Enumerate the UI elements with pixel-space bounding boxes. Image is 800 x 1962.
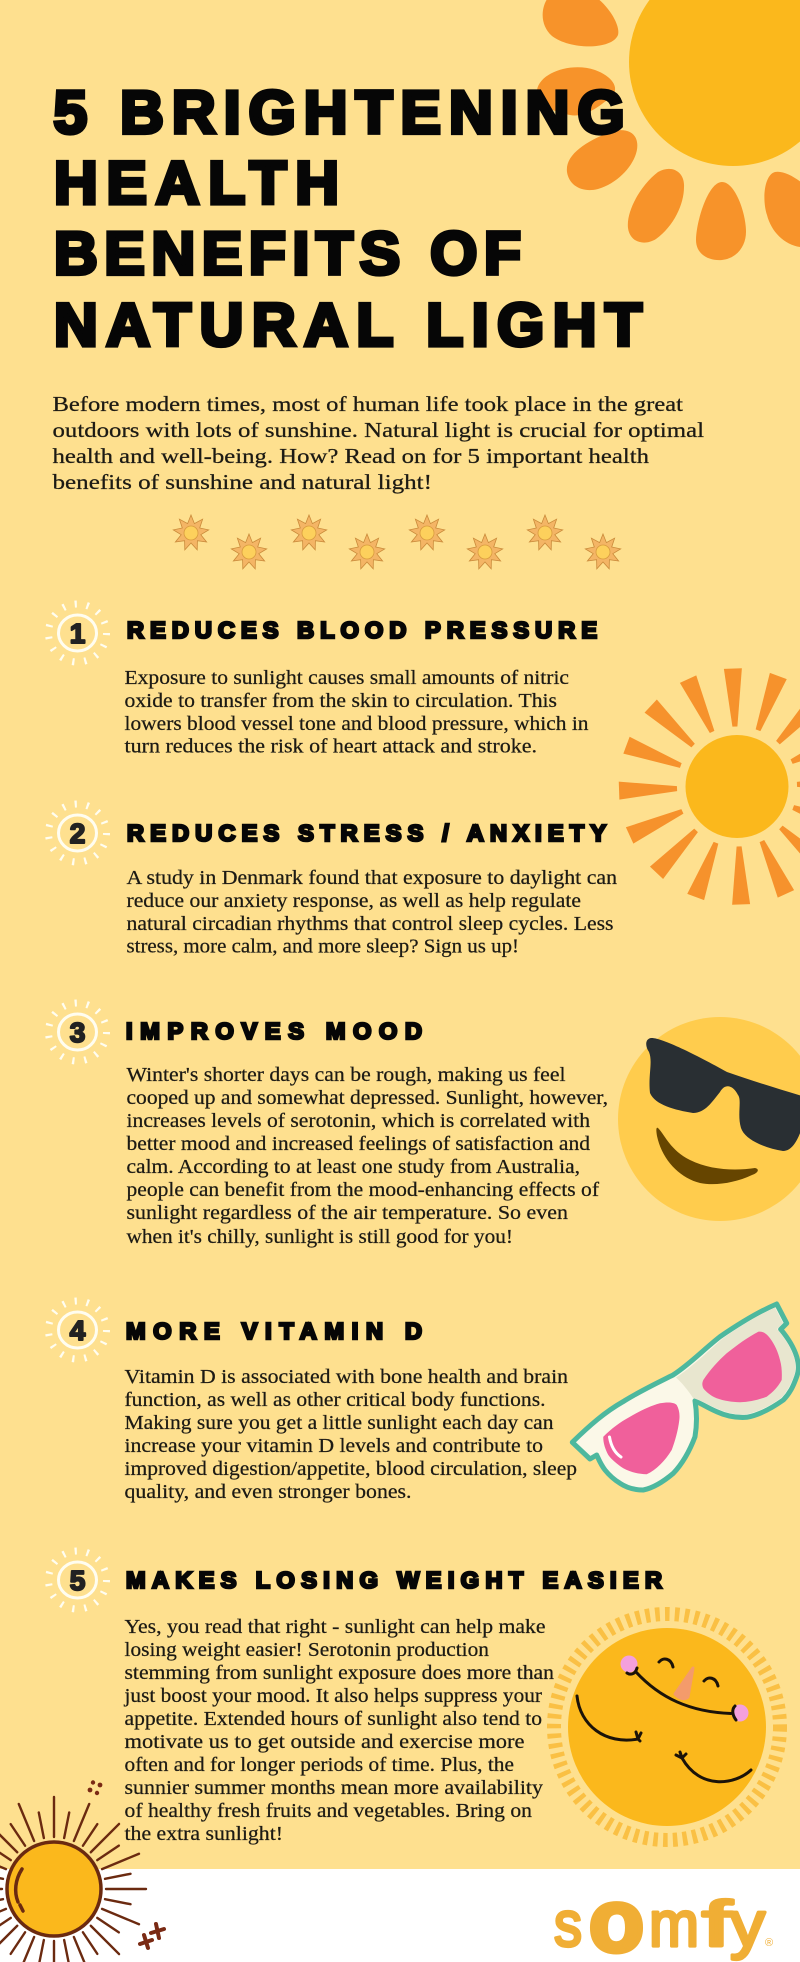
body text 3: sunlight regardless of the air temperature. So even (126, 1202, 568, 1224)
body text 3: people can benefit from the mood-enhancing effects of (126, 1179, 599, 1201)
number badge 2 (48, 804, 106, 862)
body text 3: Winter's shorter days can be rough, making us feel (126, 1064, 566, 1086)
body text 4: improved digestion/appetite, blood circulation, sleep (124, 1458, 577, 1480)
panel: makes losing weight easier (48, 1551, 662, 1845)
body text 3: increases levels of serotonin, which is correlated with (126, 1110, 590, 1132)
panel: reduces stress and anxiety (48, 804, 617, 958)
somfy logo: m (649, 1888, 699, 1960)
body text 5: the extra sunlight! (124, 1823, 283, 1845)
body text 5: appetite. Extended hours of sunlight also tend to (124, 1708, 542, 1730)
somfy logo (554, 1871, 773, 1962)
icon: outlined sun bottom left (0, 1780, 164, 1962)
body text 3: when it's chilly, sunlight is still good for you! (126, 1226, 513, 1248)
body text 4: quality, and even stronger bones. (124, 1481, 412, 1503)
heading 4: MORE VITAMIN D (126, 1318, 422, 1344)
heading 1: REDUCES BLOOD PRESSURE (127, 617, 597, 643)
number badge 5: 5 (70, 1565, 85, 1596)
body text 4: Vitamin D is associated with bone health and brain (124, 1366, 568, 1388)
number badge 1 (48, 604, 106, 662)
body text 3: calm. According to at least one study from Australia, (126, 1156, 580, 1178)
body text 2: reduce our anxiety response, as well as help regulate (126, 890, 581, 912)
icon: smiley with sunglasses (618, 1017, 800, 1221)
icon: rayed sun (619, 668, 800, 905)
body text 5: Yes, you read that right - sunlight can help make (124, 1616, 546, 1638)
body text 4: function, as well as other critical body functions. (124, 1389, 546, 1411)
title: BENEFITS OF (54, 219, 521, 287)
body text 5: often and for longer periods of time. Plus, the (124, 1754, 514, 1776)
icon: large sun top right (537, 0, 800, 260)
body text 2 (126, 867, 617, 958)
body text 3 (126, 1064, 608, 1248)
intro text: health and well-being. How? Read on for 5 important health (52, 444, 649, 468)
body text 4 (124, 1366, 577, 1503)
title: 5 BRIGHTENING (54, 78, 624, 146)
somfy logo: ® (765, 1937, 773, 1949)
decorative row of small suns (173, 515, 621, 569)
heading 2: REDUCES STRESS / ANXIETY (127, 820, 606, 846)
footer band (0, 1869, 800, 1962)
body text 1: turn reduces the risk of heart attack and stroke. (124, 736, 537, 758)
icon: pink sunglasses (572, 1304, 798, 1490)
title: HEALTH (54, 148, 339, 216)
body text 5: of healthy fresh fruits and vegetables. Bring on (124, 1800, 532, 1822)
somfy logo: f (702, 1888, 732, 1960)
panel: reduces blood pressure (48, 604, 597, 758)
body text 1 (124, 667, 588, 758)
somfy logo: s (554, 1888, 582, 1960)
number badge 3 (48, 1003, 106, 1061)
number badge 1: 1 (70, 618, 85, 649)
body text 4: Making sure you get a little sunlight each day can (124, 1412, 554, 1434)
intro text (52, 392, 704, 494)
title: NATURAL LIGHT (54, 290, 642, 358)
intro text: outdoors with lots of sunshine. Natural light is crucial for optimal (52, 418, 704, 442)
icon: happy sun (554, 1614, 780, 1840)
body text 3: cooped up and somewhat depressed. Sunlight, however, (126, 1087, 608, 1109)
body text 2: natural circadian rhythms that control sleep cycles. Less (126, 913, 614, 935)
body text 5: motivate us to get outside and exercise more (124, 1731, 524, 1753)
body text 5: stemming from sunlight exposure does more than (124, 1662, 554, 1684)
number badge 5 (48, 1551, 106, 1609)
body text 1: lowers blood vessel tone and blood pressure, which in (124, 713, 588, 735)
body text 3: better mood and increased feelings of satisfaction and (126, 1133, 590, 1155)
panel: more vitamin D (48, 1301, 577, 1503)
body text 5: losing weight easier! Serotonin production (124, 1639, 489, 1661)
heading 3: IMPROVES MOOD (126, 1018, 422, 1044)
body text 5 (123, 1616, 554, 1845)
body text 5: sunnier summer months mean more availability (124, 1777, 544, 1799)
panel: improves mood (48, 1003, 608, 1248)
body text 2: A study in Denmark found that exposure to daylight can (126, 867, 617, 889)
body text 4: increase your vitamin D levels and contribute to (124, 1435, 543, 1457)
somfy logo: y (730, 1888, 765, 1960)
body text 1: Exposure to sunlight causes small amounts of nitric (124, 667, 569, 689)
body text 5: just boost your mood. It also helps suppress your (123, 1685, 542, 1707)
title (54, 78, 642, 358)
body text 1: oxide to transfer from the skin to circulation. This (124, 690, 557, 712)
number badge 4: 4 (70, 1315, 86, 1346)
heading 5: MAKES LOSING WEIGHT EASIER (126, 1567, 662, 1593)
body text 2: stress, more calm, and more sleep? Sign us up! (126, 936, 519, 958)
number badge 2: 2 (70, 818, 85, 849)
intro text: benefits of sunshine and natural light! (52, 470, 432, 494)
intro text: Before modern times, most of human life took place in the great (52, 392, 683, 416)
number badge 4 (48, 1301, 106, 1359)
number badge 3: 3 (70, 1017, 85, 1048)
